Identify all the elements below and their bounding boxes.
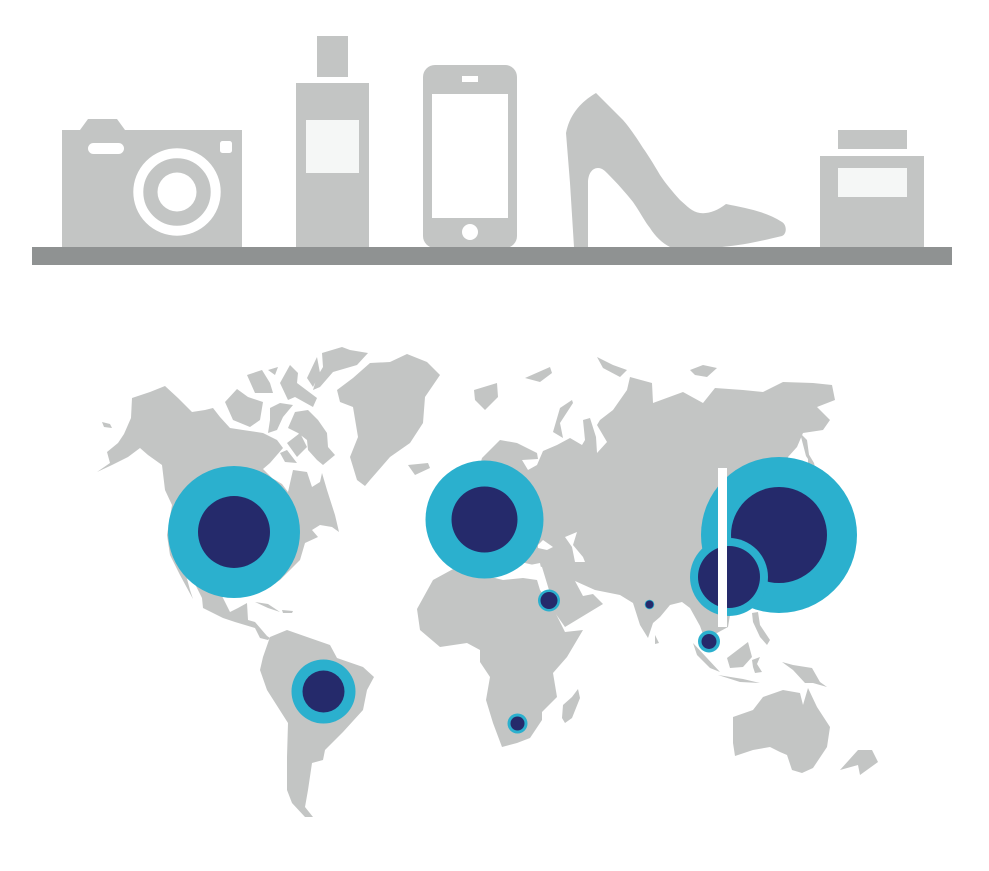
bubble: Europe bbox=[426, 460, 544, 578]
Caribbean islands bbox=[255, 602, 293, 613]
New Zealand bbox=[840, 750, 878, 775]
white vertical bar bbox=[718, 468, 727, 627]
world map bbox=[97, 347, 878, 817]
Arctic islands bbox=[102, 347, 368, 465]
continent: North America bbox=[97, 386, 339, 640]
icon: high-heel shoe bbox=[566, 93, 786, 247]
icon: jar bbox=[820, 130, 924, 247]
icon: bottle bbox=[296, 36, 369, 247]
Iceland bbox=[408, 463, 430, 475]
bubble: India bbox=[645, 600, 654, 609]
icon: camera bbox=[62, 119, 242, 247]
bubble: South Africa bbox=[508, 714, 528, 734]
continent: Africa bbox=[417, 568, 583, 747]
Russian Arctic islands bbox=[474, 357, 717, 438]
continent: South America bbox=[260, 630, 374, 817]
Southeast Asian islands bbox=[655, 612, 770, 683]
continent: Eurasia bbox=[470, 377, 835, 640]
bubble: Brazil bbox=[292, 660, 356, 724]
bubble: China small bbox=[690, 538, 768, 616]
bubble: East Asia large bbox=[701, 457, 857, 613]
bubble: Egypt bbox=[538, 590, 560, 612]
Sakhalin and Japan bbox=[800, 433, 818, 480]
Greenland bbox=[337, 354, 440, 486]
bubble: North America bbox=[168, 466, 300, 598]
shelf bbox=[32, 247, 952, 265]
inland seas bbox=[520, 532, 585, 578]
icon: smartphone bbox=[423, 65, 517, 248]
Madagascar bbox=[562, 689, 580, 723]
continent: Australia bbox=[733, 688, 830, 773]
bubble: Southeast Asia bbox=[698, 630, 720, 652]
New Guinea bbox=[782, 662, 827, 687]
